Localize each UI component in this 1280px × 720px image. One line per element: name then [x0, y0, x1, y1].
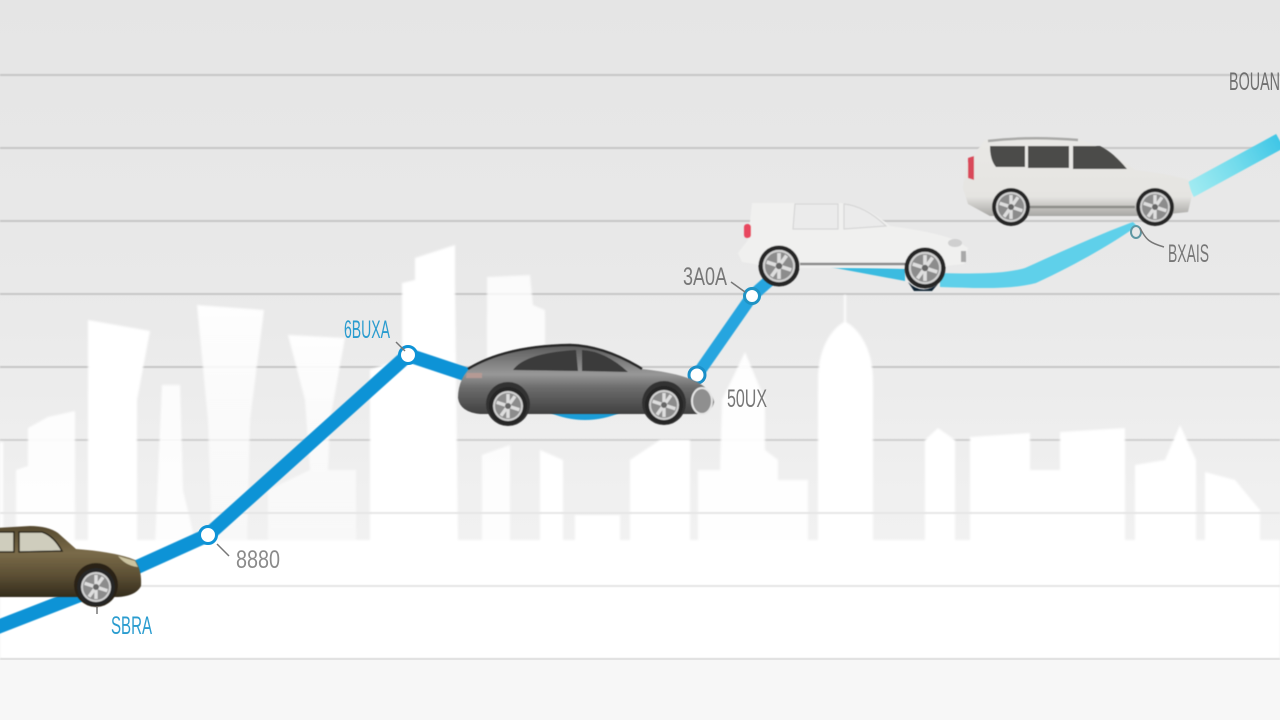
window outlines [793, 204, 886, 229]
tail light [466, 373, 482, 378]
tyre shadow [908, 282, 938, 291]
segment: end of line [1190, 141, 1280, 190]
rear wheel [758, 245, 800, 287]
grille [961, 251, 966, 262]
rear wheel [992, 188, 1030, 226]
roof rail [988, 138, 1078, 141]
roof highlight [468, 345, 642, 369]
front wheel [645, 386, 683, 424]
label: second grey: 8880 [236, 546, 280, 574]
data point nodes [200, 226, 1141, 544]
windows [0, 532, 62, 552]
label: fifth grey: 3A0A [683, 263, 727, 291]
car: silver SUV [963, 138, 1192, 226]
body [0, 526, 141, 597]
wheel arch [74, 563, 118, 607]
car: brown hatchback [0, 526, 141, 607]
windows [513, 350, 628, 372]
front grille [692, 388, 712, 414]
body [738, 203, 968, 268]
sill line [800, 263, 905, 265]
leader lines [97, 228, 1164, 614]
horizontal grid lines [0, 75, 1280, 440]
node 1 [200, 526, 216, 544]
segment: pale cyan rise [940, 222, 1137, 288]
headlight [118, 556, 138, 567]
car: grey sedan [458, 345, 714, 426]
tail light [744, 224, 751, 238]
front wheel [904, 247, 946, 289]
node 5 [1131, 226, 1141, 238]
tail light [968, 156, 974, 180]
lower grid lines [0, 513, 1280, 659]
label: third blue: 6BUXA [344, 316, 390, 344]
segment: mid blue rise [697, 280, 770, 375]
segment: under sedan [548, 412, 622, 420]
rear wheel [489, 387, 527, 425]
front wheel [1136, 188, 1174, 226]
node 4 [744, 288, 760, 304]
front lamp [948, 239, 962, 247]
wheel [77, 568, 115, 606]
body [458, 345, 714, 414]
label: fourth grey: 50UX [727, 385, 767, 413]
node 2 [400, 346, 416, 364]
footer band [0, 660, 1280, 720]
node 3 [689, 367, 705, 383]
label: sixth grey: BXAIS [1168, 240, 1209, 268]
city skyline silhouette [0, 245, 1280, 660]
segment: cyan plateau [830, 267, 905, 281]
rising trend line [0, 141, 1280, 628]
body [963, 138, 1192, 216]
sill line [1030, 206, 1135, 208]
segment: dark blue rise [0, 355, 468, 628]
windows [990, 146, 1127, 169]
value labels [111, 68, 1280, 640]
rear arch [486, 382, 530, 426]
car: pale white SUV [738, 203, 968, 291]
label: first blue: SBRA [111, 612, 152, 640]
front arch [642, 381, 686, 425]
